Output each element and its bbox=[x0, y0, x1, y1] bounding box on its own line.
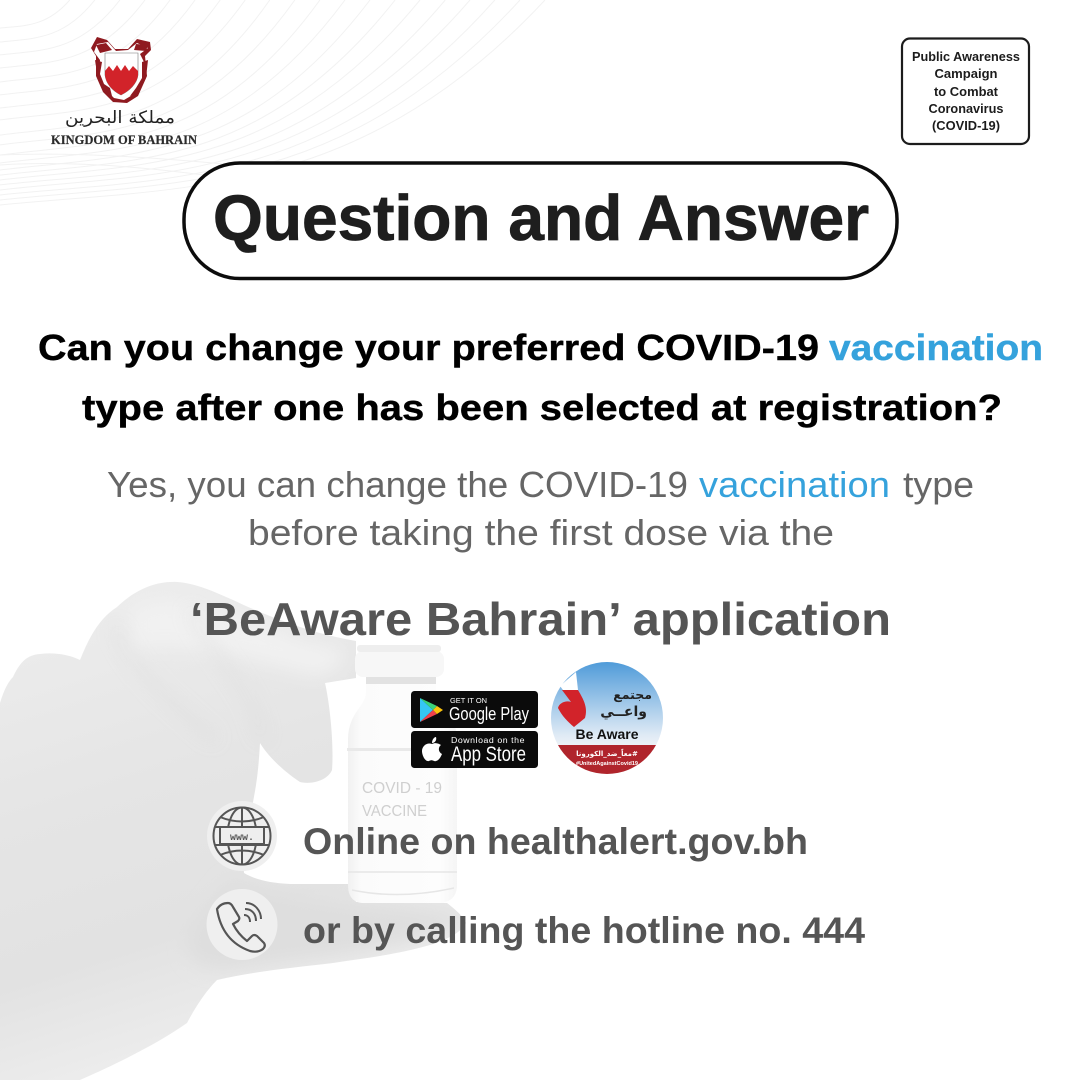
icon: flag ribbon bbox=[558, 690, 586, 727]
App Store badge: Download on the bbox=[451, 736, 525, 745]
campaign box: Coronavirus bbox=[928, 101, 1004, 116]
question text: vaccination bbox=[829, 327, 1043, 368]
Google Play badge: GET IT ON bbox=[450, 698, 487, 705]
question text: type after one has been selected at registration? bbox=[82, 387, 1002, 428]
answer text: before taking the first dose via the bbox=[248, 512, 834, 553]
logo: Kingdom of Bahrain bbox=[51, 37, 197, 147]
online text: Online on healthalert.gov.bh bbox=[303, 820, 808, 862]
Be Aware badge: واعــي bbox=[600, 704, 647, 720]
Google Play badge bbox=[411, 691, 538, 728]
answer text: vaccination bbox=[699, 464, 890, 505]
Be Aware badge: #معاً_ضد_الكورونا bbox=[576, 748, 638, 758]
App Store badge bbox=[411, 731, 538, 768]
title pill bbox=[184, 163, 897, 278]
icon: coat of arms bbox=[91, 37, 151, 103]
vaccine vial bbox=[347, 645, 458, 903]
vial label text: COVID - 19 bbox=[362, 780, 442, 797]
vial cap bbox=[355, 651, 444, 677]
English name: KINGDOM OF BAHRAIN bbox=[51, 133, 197, 147]
Be Aware badge: مجتمع bbox=[613, 687, 652, 702]
finger shading bbox=[115, 600, 470, 968]
background curved line pattern bbox=[0, 0, 545, 205]
answer text: type bbox=[903, 464, 974, 505]
title pill: Question and Answer bbox=[213, 182, 869, 254]
answer text: Yes, you can change the COVID-19 bbox=[107, 464, 688, 505]
Be Aware badge bbox=[551, 662, 663, 775]
campaign box: to Combat bbox=[934, 84, 999, 99]
icon: globe www: www. bbox=[230, 833, 254, 844]
campaign box: (COVID-19) bbox=[932, 118, 1000, 133]
Be Aware badge: #UnitedAgainstCovid19 bbox=[576, 761, 638, 767]
campaign box: Campaign bbox=[934, 66, 998, 81]
Arabic name: مملكة البحرين bbox=[65, 108, 175, 128]
question text bbox=[38, 327, 1043, 428]
App Store badge: App Store bbox=[451, 743, 526, 766]
vaccine vial: VACCINE bbox=[362, 803, 427, 820]
campaign box: Public Awareness bbox=[912, 49, 1020, 64]
Be Aware badge: Be Aware bbox=[576, 726, 639, 742]
icon: phone bbox=[206, 889, 278, 960]
hand in glove holding the vial bbox=[0, 582, 470, 1080]
Google Play badge: Google Play bbox=[449, 704, 529, 724]
icon: globe www bbox=[207, 801, 277, 871]
hotline text: or by calling the hotline no. 444 bbox=[303, 909, 865, 951]
question text: Can you change your preferred COVID-19 bbox=[38, 327, 819, 368]
campaign box bbox=[902, 38, 1029, 144]
app name heading: ‘BeAware Bahrain’ application bbox=[190, 593, 891, 645]
answer text bbox=[107, 464, 974, 553]
vial neck and body bbox=[348, 677, 457, 903]
